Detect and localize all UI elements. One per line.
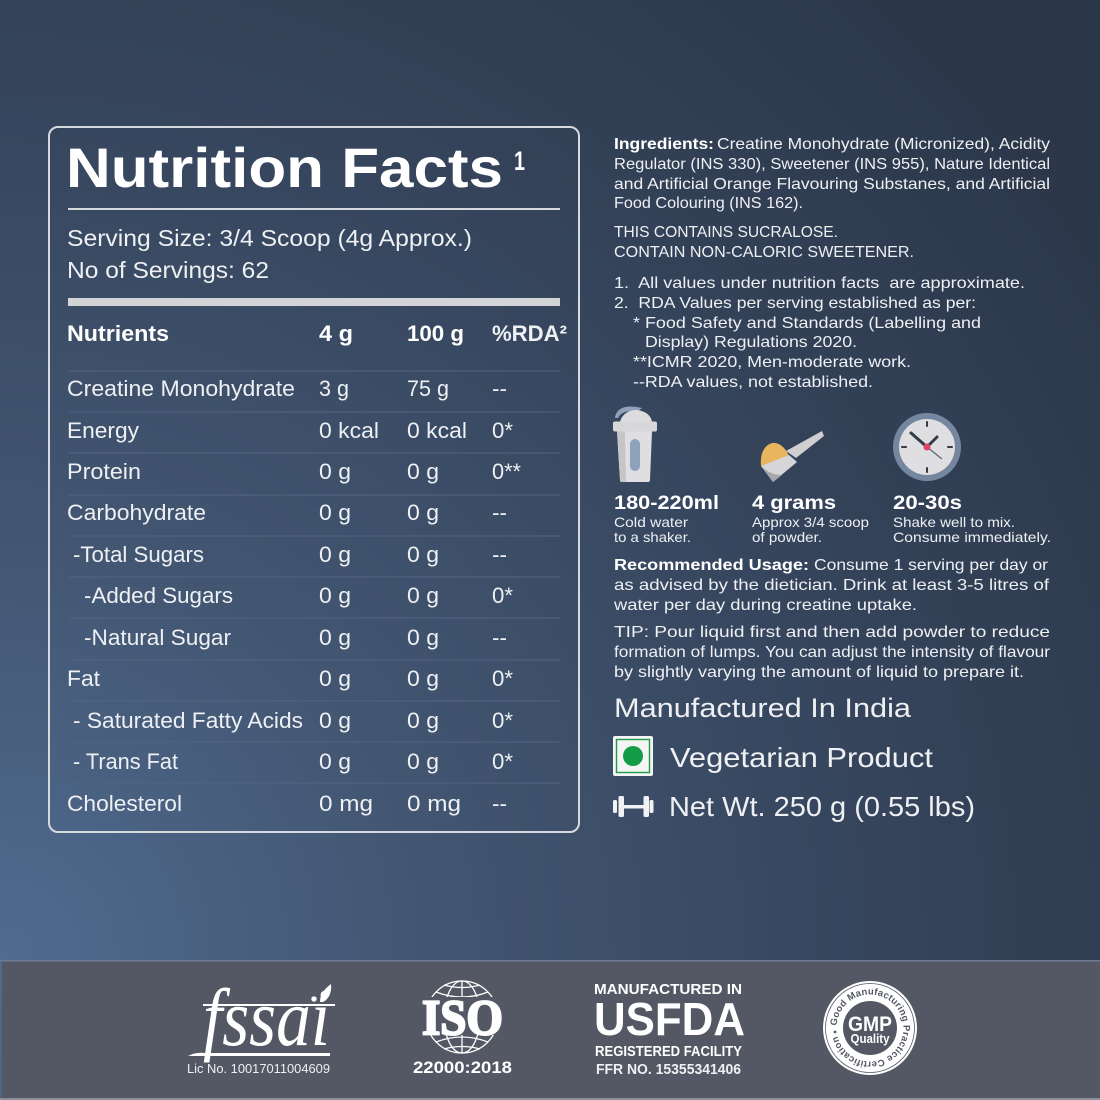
footnotes: * Food Safety and Standards (Labelling and: [633, 315, 981, 332]
row: energy: [67, 418, 513, 443]
heading: nutrition facts: Nutrition Facts: [66, 136, 503, 199]
logo: usfda: [594, 981, 745, 1078]
row: protein: Protein: [67, 459, 141, 484]
usage step: water: [614, 493, 719, 545]
row: creatine monohydrate: 3 g: [319, 376, 349, 401]
row: cholesterol: --: [492, 791, 507, 816]
row: energy: 0*: [492, 418, 513, 443]
recommended usage: Consume 1 serving per day or: [814, 557, 1049, 574]
ingredients text: and Artificial Orange Flavouring Substanes, and Artificial: [614, 176, 1050, 193]
footnotes: Display) Regulations 2020.: [645, 334, 857, 351]
logo: iso: 22000:2018: [413, 1058, 512, 1077]
row: total sugars: 0 g: [319, 542, 351, 567]
row: added sugars: [84, 583, 513, 608]
row: added sugars: -Added Sugars: [84, 583, 233, 608]
serving information: Serving Size: 3/4 Scoop (4g Approx.): [67, 225, 472, 251]
ingredients text: Ingredients:: [614, 136, 714, 153]
footnotes: --RDA values, not established.: [633, 374, 873, 391]
row: fat: [67, 666, 513, 691]
logo: usfda: MANUFACTURED IN: [594, 981, 742, 998]
panel: certifications: [0, 960, 1100, 1100]
usage step: water: 180-220ml: [614, 493, 719, 514]
tip: TIP: Pour liquid first and then add powder to reduce: [614, 624, 1050, 641]
table header: 100 g: [407, 321, 464, 346]
serving information: [67, 225, 472, 283]
logo: fssai: Lic No. 10017011004609: [187, 1061, 330, 1076]
row: natural sugar: --: [492, 625, 507, 650]
usage step: powder: of powder.: [752, 529, 822, 545]
recommended usage: as advised by the dietician. Drink at least 3-5 litres of: [614, 577, 1050, 594]
ingredients text: Creatine Monohydrate (Micronized), Acidity: [717, 136, 1050, 153]
usage step: shake: 20-30s: [893, 493, 962, 514]
row: trans fat: 0 g: [319, 749, 351, 774]
footnotes: 1. All values under nutrition facts are approximate.: [614, 275, 1025, 292]
row: trans fat: [73, 749, 513, 774]
logo: gmp: Quality: [850, 1032, 890, 1046]
logo: usfda: FFR NO. 15355341406: [596, 1062, 741, 1078]
vegetarian product: Vegetarian Product: [670, 742, 933, 773]
row: fat: 0 g: [407, 666, 439, 691]
ingredients text: Regulator (INS 330), Sweetener (INS 955), Nature Identical: [614, 156, 1050, 173]
nutrition table: [67, 321, 567, 816]
row: added sugars: 0 g: [407, 583, 439, 608]
row: added sugars: 0 g: [319, 583, 351, 608]
row: energy: 0 kcal: [319, 418, 379, 443]
row: fat: Fat: [67, 666, 100, 691]
row: saturated fatty acids: 0 g: [407, 708, 439, 733]
usage step: shake: Consume immediately.: [893, 529, 1051, 545]
icon: dumbbell: [613, 796, 654, 817]
row: natural sugar: 0 g: [407, 625, 439, 650]
usage step: shake: [893, 493, 1051, 545]
row: saturated fatty acids: - Saturated Fatty Acids: [73, 708, 303, 733]
row: cholesterol: 0 mg: [319, 791, 373, 816]
icon: scoop with powder: [761, 431, 824, 482]
tip: by slightly varying the amount of liquid to prepare it.: [614, 664, 1024, 681]
table header: 4 g: [319, 321, 353, 346]
icon: vegetarian mark: [613, 736, 653, 776]
row: total sugars: [73, 542, 507, 567]
row: cholesterol: Cholesterol: [67, 791, 182, 816]
row: creatine monohydrate: --: [492, 376, 507, 401]
row: creatine monohydrate: [67, 376, 507, 401]
table header: Nutrients: [67, 321, 169, 346]
row: carbohydrate: 0 g: [407, 500, 439, 525]
row: total sugars: --: [492, 542, 507, 567]
row: carbohydrate: [67, 500, 507, 525]
logo: fssai: fssai: [203, 972, 330, 1063]
row: saturated fatty acids: 0 g: [319, 708, 351, 733]
footnotes: [614, 275, 1025, 391]
usage step: powder: [752, 493, 869, 545]
row: trans fat: - Trans Fat: [73, 749, 178, 774]
icon: shaker: [613, 406, 657, 482]
usage step: powder: 4 grams: [752, 493, 836, 514]
row: fat: 0 g: [319, 666, 351, 691]
usage step: powder: Approx 3/4 scoop: [752, 514, 869, 530]
row: total sugars: 0 g: [407, 542, 439, 567]
panel: nutrition facts: [49, 127, 579, 832]
sweetener notice: CONTAIN NON-CALORIC SWEETENER.: [614, 244, 914, 261]
heading: nutrition facts: 1: [514, 146, 525, 176]
row: protein: 0 g: [407, 459, 439, 484]
row: energy: 0 kcal: [407, 418, 467, 443]
recommended usage: Recommended Usage:: [614, 557, 809, 574]
row: protein: [67, 459, 521, 484]
row: carbohydrate: --: [492, 500, 507, 525]
usage step: water: Cold water: [614, 514, 688, 530]
row: natural sugar: -Natural Sugar: [84, 625, 231, 650]
table header: %RDA²: [492, 321, 567, 346]
net weight: Net Wt. 250 g (0.55 lbs): [669, 791, 975, 822]
sweetener notice: [614, 224, 914, 261]
row: saturated fatty acids: [73, 708, 513, 733]
row: carbohydrate: Carbohydrate: [67, 500, 206, 525]
logo: iso: ISO: [422, 989, 503, 1045]
usage step: water: to a shaker.: [614, 529, 691, 545]
row: added sugars: 0*: [492, 583, 513, 608]
row: energy: Energy: [67, 418, 139, 443]
ingredients text: Food Colouring (INS 162).: [614, 195, 803, 212]
row: natural sugar: 0 g: [319, 625, 351, 650]
row: natural sugar: [84, 625, 507, 650]
usage step: shake: Shake well to mix.: [893, 514, 1015, 530]
row: carbohydrate: 0 g: [319, 500, 351, 525]
row: cholesterol: [67, 791, 507, 816]
footnotes: 2. RDA Values per serving established as per:: [614, 295, 976, 312]
row: protein: 0 g: [319, 459, 351, 484]
row: creatine monohydrate: Creatine Monohydrate: [67, 376, 295, 401]
logo: gmp: GMP: [848, 1013, 892, 1036]
row: creatine monohydrate: 75 g: [407, 376, 449, 401]
logo: usfda: REGISTERED FACILITY: [595, 1044, 742, 1060]
icon: clock: [893, 413, 961, 481]
tip: [614, 624, 1051, 681]
row: trans fat: 0 g: [407, 749, 439, 774]
recommended usage: [613, 557, 1050, 614]
row: fat: 0*: [492, 666, 513, 691]
row: cholesterol: 0 mg: [407, 791, 461, 816]
ingredients text: [614, 136, 1050, 212]
logo: iso: [413, 981, 512, 1077]
table header: [67, 321, 567, 346]
row: trans fat: 0*: [492, 749, 513, 774]
tip: formation of lumps. You can adjust the intensity of flavour: [614, 644, 1051, 661]
row: protein: 0**: [492, 459, 521, 484]
row: saturated fatty acids: 0*: [492, 708, 513, 733]
recommended usage: water per day during creatine uptake.: [613, 597, 917, 614]
footnotes: **ICMR 2020, Men-moderate work.: [633, 354, 911, 371]
manufactured in india: Manufactured In India: [614, 693, 912, 723]
sweetener notice: THIS CONTAINS SUCRALOSE.: [614, 224, 838, 241]
row: total sugars: -Total Sugars: [73, 542, 204, 567]
logo: gmp: Good Manufacturing Practice Certification: [830, 988, 910, 1068]
serving information: No of Servings: 62: [67, 257, 269, 283]
logo: usfda: USFDA: [594, 993, 745, 1045]
